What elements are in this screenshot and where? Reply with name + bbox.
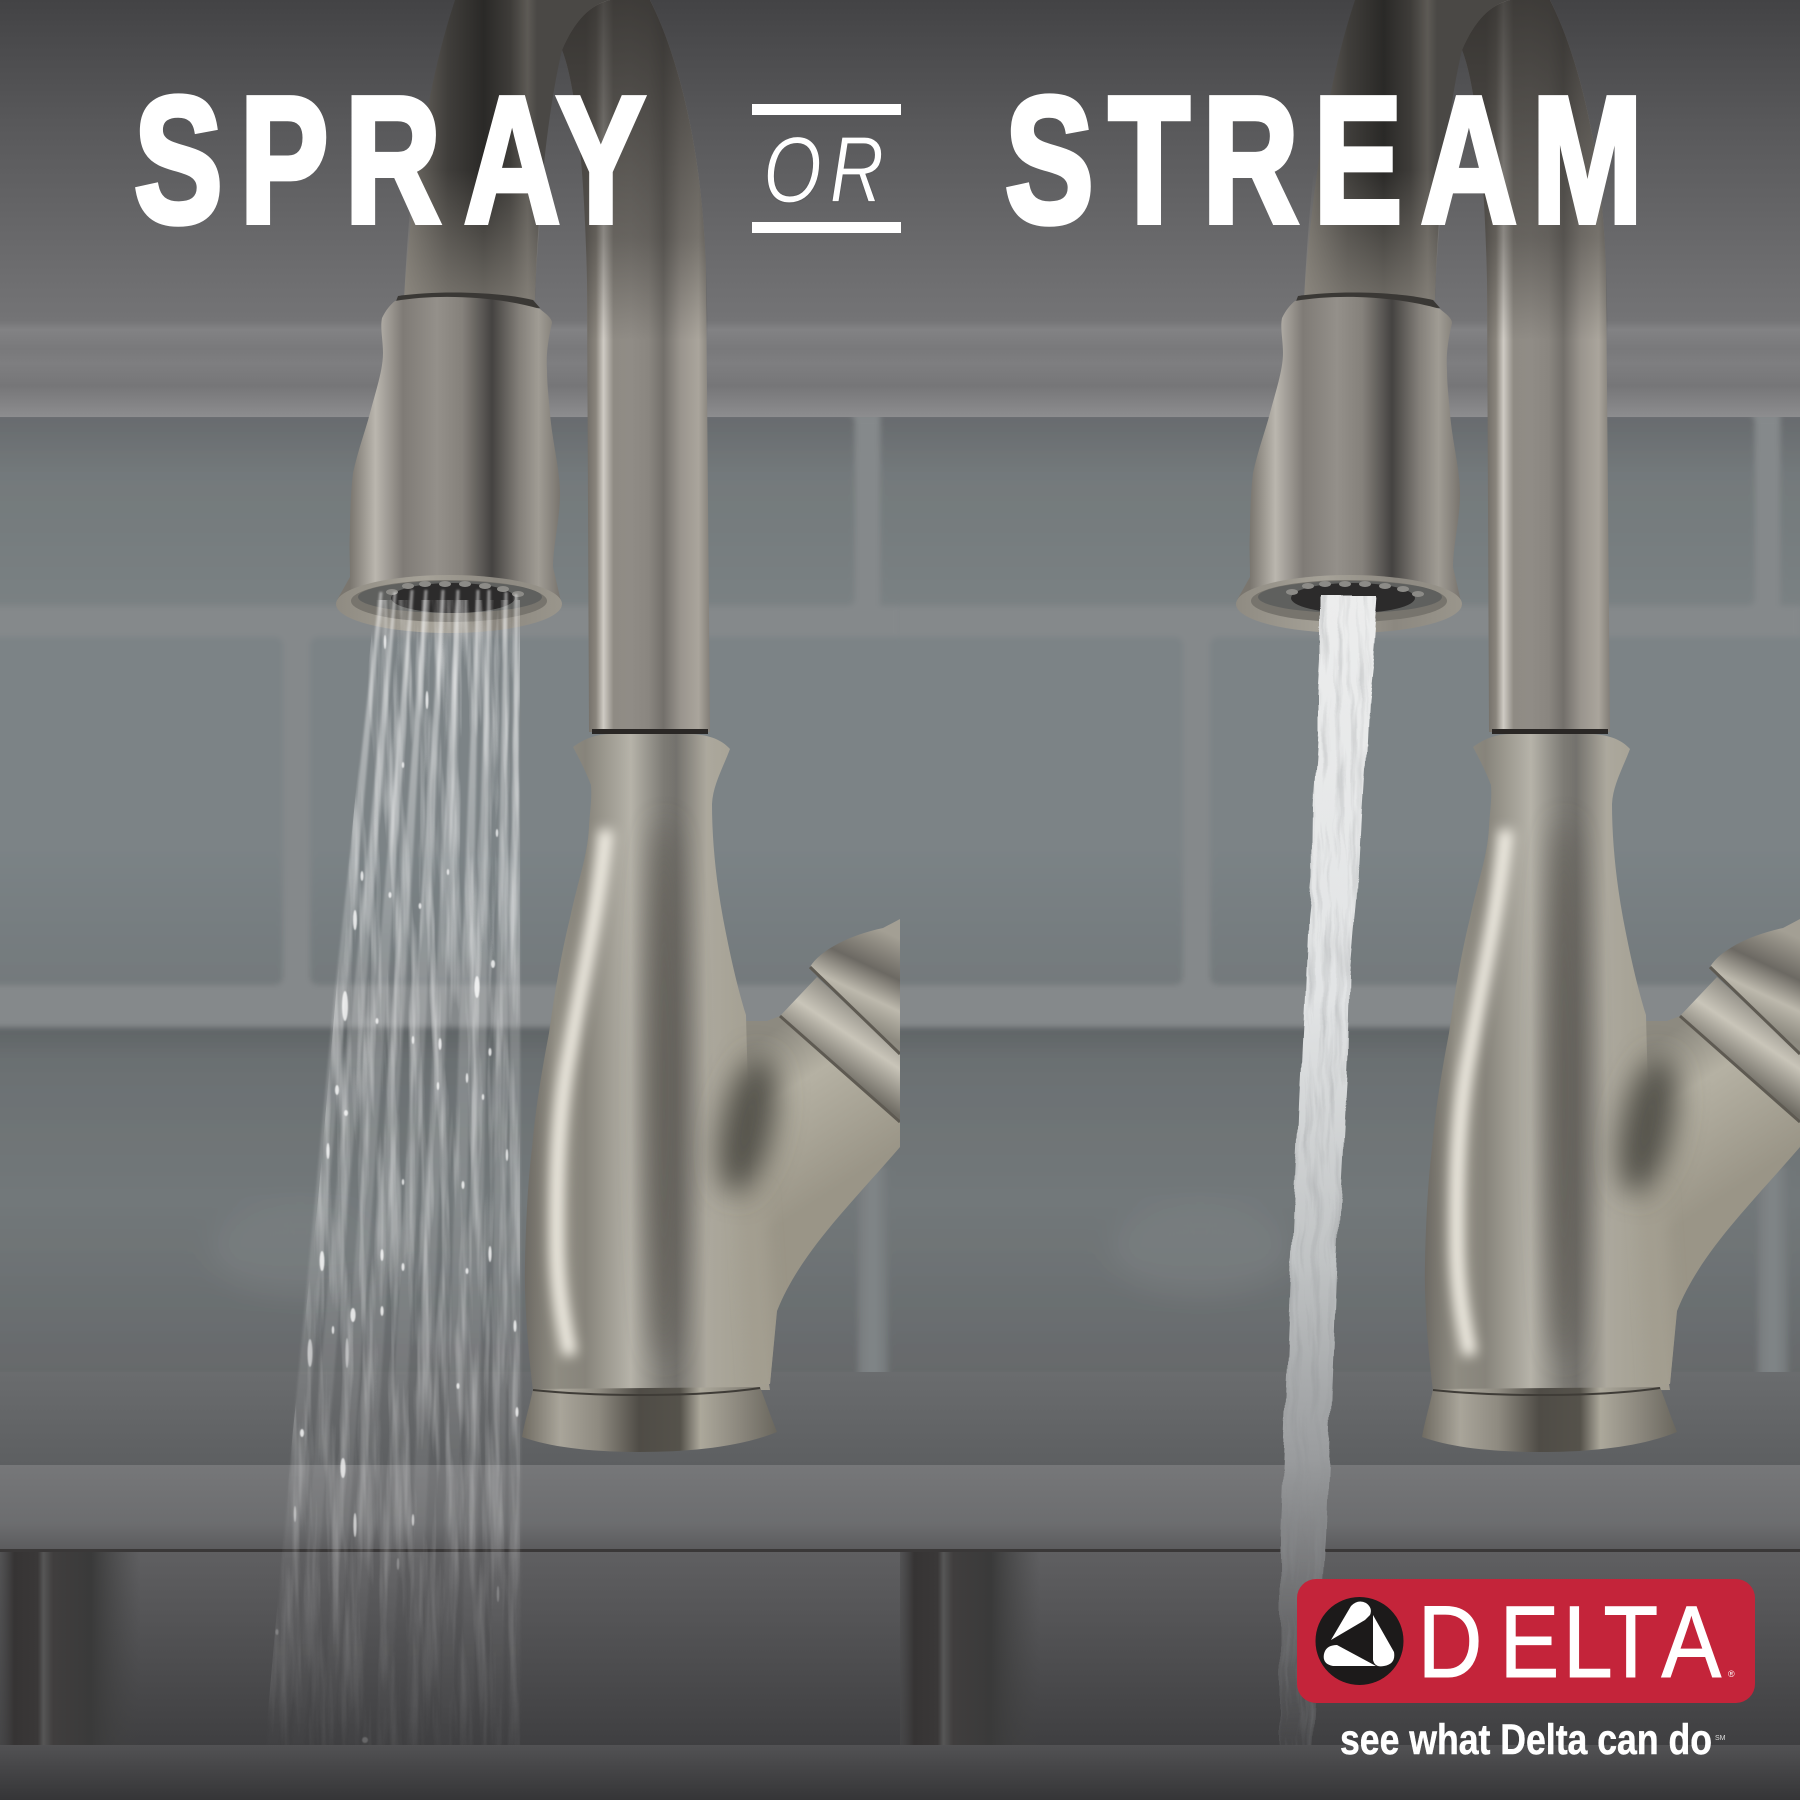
faucet	[1236, 0, 1800, 1452]
water spray	[270, 588, 521, 1745]
kitchen background: tile wall, counter and sink	[0, 0, 930, 1800]
panel: stream side	[880, 0, 1800, 1800]
tagline: see what Delta can do	[1340, 1716, 1712, 1764]
word OR: OR	[763, 118, 884, 223]
wordmark: DELTA	[1418, 1586, 1721, 1699]
registered mark: ®	[1728, 1669, 1735, 1679]
water stream	[1278, 595, 1376, 1745]
icon: Delta triangle mark	[1316, 1597, 1404, 1685]
title: SPRAY: SPRAY	[134, 59, 645, 261]
service mark: SM	[1715, 1735, 1726, 1742]
faucet	[336, 0, 900, 1452]
panel: spray side	[0, 0, 930, 1800]
Delta logo badge	[1297, 1579, 1755, 1703]
kitchen background: tile wall, counter and sink	[880, 0, 1800, 1800]
title: STREAM: STREAM	[1005, 59, 1643, 261]
OR divider	[752, 104, 901, 233]
